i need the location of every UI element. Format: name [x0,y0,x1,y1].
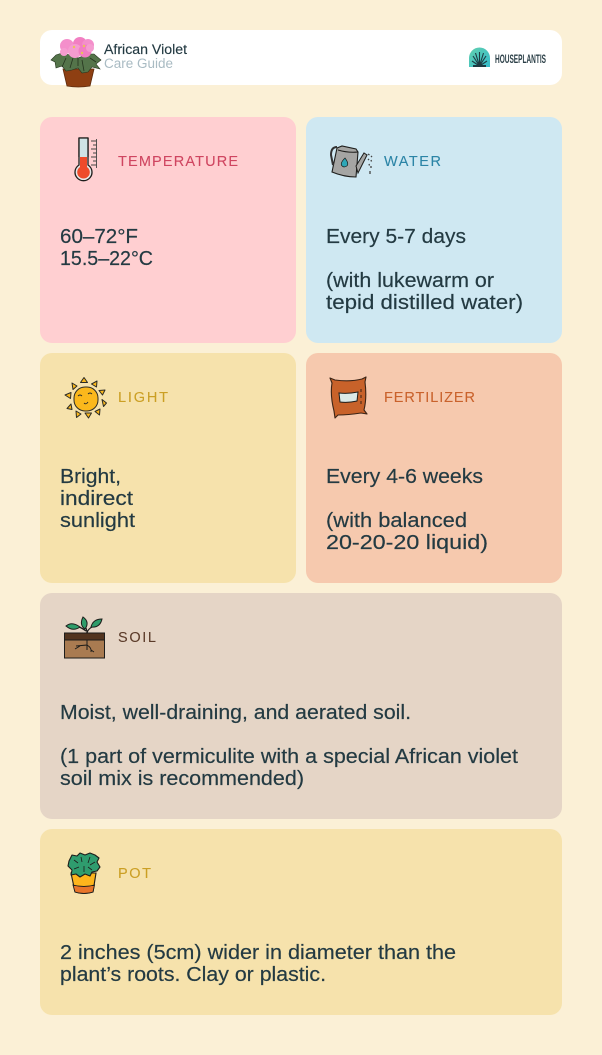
text block: Moist, well-draining, and aerated soil. [60,702,411,724]
text block: sunlight [60,510,135,532]
text block: Every 5-7 days [326,226,466,248]
icon: potted African violet [51,37,101,87]
text block [60,702,518,790]
text block: (1 part of vermiculite with a special African violet [60,746,518,768]
text block: tepid distilled water) [326,292,523,314]
heading: POT [118,866,151,882]
text block: 15.5–22°C [60,248,153,270]
panel: water [306,117,562,343]
text block: plant’s roots. Clay or plastic. [60,964,326,986]
text block: indirect [60,488,133,510]
text block [60,942,456,986]
text block: 2 inches (5cm) wider in diameter than the [60,942,456,964]
heading: WATER [384,154,441,170]
panel: fertilizer [306,353,562,583]
icon: potted plant [68,853,100,894]
icon: thermometer [75,138,96,181]
panel: temperature [40,117,296,343]
text block [60,466,135,532]
heading: SOIL [118,630,156,646]
icon: seedling in soil [64,617,104,658]
heading: LIGHT [118,390,168,406]
icon: sun [65,378,106,418]
text block: soil mix is recommended) [60,768,304,790]
title: African Violet [104,42,187,57]
text block: (with balanced [326,510,467,532]
text block [326,226,523,314]
logo: Houseplantis [469,48,546,67]
icon: watering can [331,146,372,177]
text block: (with lukewarm or [326,270,494,292]
text block: 60–72°F [60,226,138,248]
panel: light [40,353,296,583]
title: Care Guide [104,56,173,71]
text block: 20-20-20 liquid) [326,532,488,554]
text block [60,226,153,270]
text block: Bright, [60,466,121,488]
heading: FERTILIZER [384,390,475,406]
title [104,42,187,71]
icon: fertilizer bag [330,377,367,418]
panel: pot [40,829,562,1015]
logo: Houseplantis: HOUSEPLANTIS [495,52,546,66]
panel: soil [40,593,562,819]
header bar [40,30,562,87]
text block: Every 4-6 weeks [326,466,483,488]
text block [326,466,488,554]
heading: TEMPERATURE [118,154,238,170]
